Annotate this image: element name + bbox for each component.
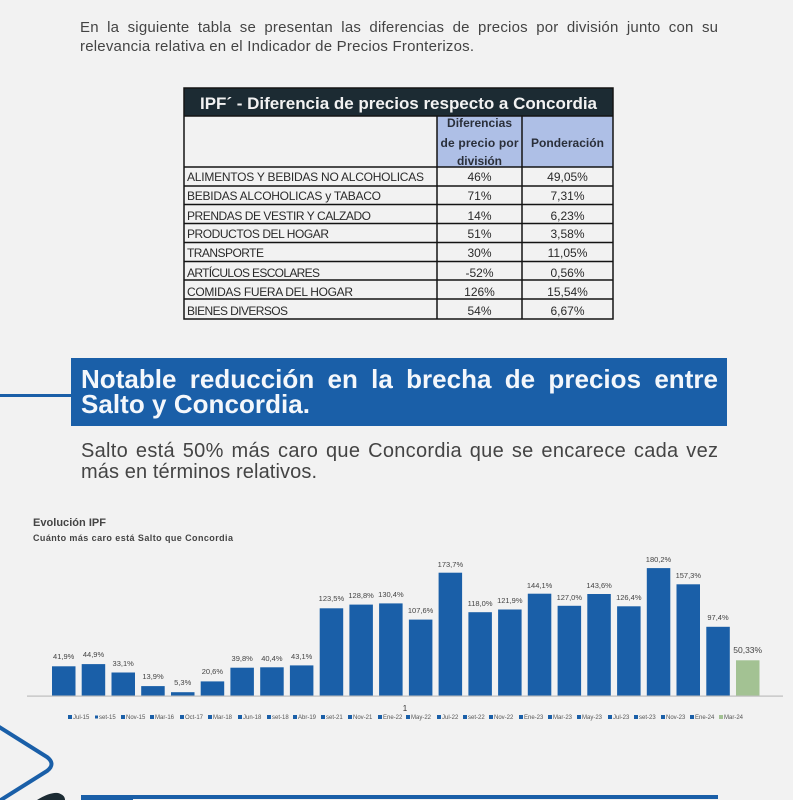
table rows: 3,58% [550,227,585,241]
table rows: 14% [467,209,492,223]
legend: Ene-23 [524,715,544,721]
value labels: 50,33% [733,645,763,655]
legend: Oct-17 [185,715,204,721]
value labels: 130,4% [378,590,404,599]
legend: Nov-23 [666,715,686,721]
value labels: 121,9% [497,596,523,605]
legend: Nov-21 [353,715,373,721]
table rows: 11,05% [548,246,588,260]
connector line to heading [0,394,71,397]
column headers: Diferencias [447,116,512,130]
legend: Nov-15 [126,715,146,721]
legend: Nov-22 [494,715,514,721]
subheading [81,440,718,483]
value labels: 44,9% [83,650,104,659]
legend: set-22 [468,715,485,721]
legend [68,715,744,721]
legend: May-22 [411,715,432,721]
table rows: 15,54% [547,285,588,299]
table rows: BEBIDAS ALCOHOLICAS y TABACO [187,189,381,203]
price difference table [184,88,613,319]
value labels: 41,9% [53,652,75,661]
table rows: 126% [464,285,495,299]
heading banner [71,358,727,426]
value labels: 33,1% [113,659,134,668]
value labels: 39,8% [232,654,253,663]
value labels: 157,3% [676,571,701,580]
table rows: ALIMENTOS Y BEBIDAS NO ALCOHOLICAS [187,170,424,184]
legend: Abr-19 [298,715,317,721]
legend: Jun-18 [243,715,262,721]
legend: Mar-23 [553,715,573,721]
value labels: 127,0% [557,593,582,602]
bottom banner edge [81,795,718,800]
chart title: Evolución IPF [33,517,106,529]
value labels: 126,4% [616,593,642,602]
table rows: 0,56% [550,266,585,280]
table rows: COMIDAS FUERA DEL HOGAR [187,285,353,299]
table rows: 30% [467,246,492,260]
table rows: TRANSPORTE [187,246,264,260]
axis category: 1 [403,704,408,713]
bar chart: IPF evolution [27,555,783,721]
legend: May-23 [582,715,603,721]
table rows: 51% [467,227,492,241]
column headers: Ponderación [531,136,604,150]
heading banner: Salto y Concordia. [81,389,310,419]
value labels: 123,5% [319,594,344,603]
value labels: 128,8% [348,591,374,600]
value labels: 43,1% [291,652,313,661]
legend: Ene-22 [383,715,403,721]
value labels: 143,6% [586,581,612,590]
legend: Mar-18 [213,715,233,721]
value labels: 144,1% [527,581,553,590]
intro paragraph: relevancia relativa en el Indicador de Precios Fronterizos. [80,38,474,55]
legend: Ene-24 [695,715,715,721]
subheading: Salto está 50% más caro que Concordia que se encarece cada vez [81,440,718,462]
decorative chevron outline [0,725,52,800]
table rows: 7,31% [550,189,585,203]
column headers [437,116,613,168]
legend: Mar-16 [155,715,175,721]
legend: set-23 [639,715,656,721]
table rows: PRODUCTOS DEL HOGAR [187,227,329,241]
table rows: ARTÍCULOS ESCOLARES [187,265,320,280]
chart title [33,517,234,543]
legend: set-15 [99,715,116,721]
value labels: 107,6% [408,606,434,615]
table rows: 54% [467,304,492,318]
intro paragraph [80,19,718,55]
value labels: 20,6% [202,667,223,676]
value labels: 180,2% [646,555,672,564]
table rows: 49,05% [547,170,588,184]
intro paragraph: En la siguiente tabla se presentan las diferencias de precios por división junto con su [80,19,718,36]
table rows [187,170,588,318]
value labels: 5,3% [174,678,192,687]
legend: Mar-24 [724,715,744,721]
value labels: 13,9% [142,672,164,681]
dark icon fragment [37,793,65,800]
legend: set-21 [326,715,343,721]
column headers: división [457,154,502,168]
value labels [53,555,763,687]
legend: Jul-22 [442,715,459,721]
value labels: 40,4% [261,654,283,663]
table title bar: IPF´ - Diferencia de precios respecto a Concordia [200,94,598,113]
table rows: 6,23% [550,209,585,223]
value labels: 118,0% [468,599,493,608]
bars [52,568,760,696]
table rows: 6,67% [550,304,585,318]
legend: Jul-15 [73,715,90,721]
table rows: 71% [467,189,492,203]
table rows: PRENDAS DE VESTIR Y CALZADO [187,209,371,223]
table rows: 46% [467,170,492,184]
legend: set-18 [272,715,289,721]
chart title: Cuánto más caro está Salto que Concordia [33,533,234,543]
table rows: -52% [465,266,494,280]
legend: Jul-23 [613,715,630,721]
heading banner: Notable reducción en la brecha de precios entre [81,364,718,394]
value labels: 173,7% [438,560,463,569]
table rows: BIENES DIVERSOS [187,304,288,318]
column headers: de precio por [440,136,519,150]
axis [27,696,783,697]
table title bar [184,88,613,116]
subheading: más en términos relativos. [81,461,317,483]
value labels: 97,4% [707,613,729,622]
